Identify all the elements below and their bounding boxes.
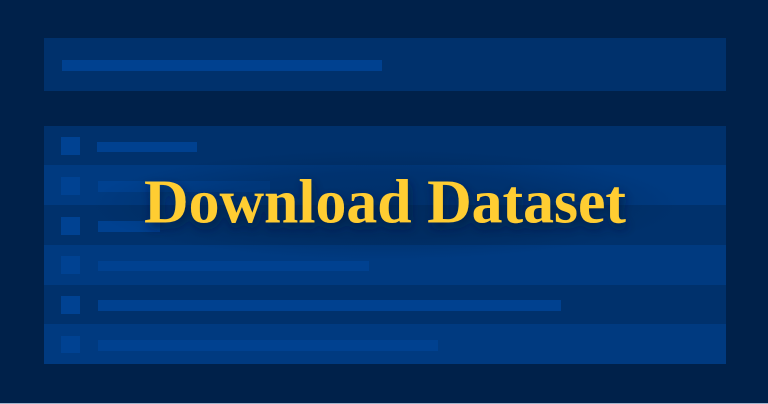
row 4: [44, 245, 726, 285]
row 5 square: [61, 296, 80, 314]
bottom edge line: [0, 403, 768, 404]
row 3 square: [61, 217, 80, 235]
row 5: [61, 296, 561, 314]
row 6 square: [61, 336, 80, 353]
row 1 bar: [97, 142, 197, 152]
row 5 bar: [98, 300, 561, 311]
title: Download Dataset: [144, 168, 626, 236]
row 1: [61, 137, 197, 155]
row 6: [44, 324, 726, 364]
row 6 bar: [98, 340, 438, 351]
row 3: [61, 217, 160, 235]
row 2: [44, 165, 726, 205]
row 2 bar: [98, 181, 270, 192]
header bar: [62, 60, 382, 71]
row 4 bar: [98, 261, 369, 271]
panel: header: [44, 38, 726, 91]
title shadow glow: [90, 150, 680, 260]
row 1 square: [61, 137, 80, 155]
row 4 square: [61, 256, 80, 274]
row 2 square: [61, 177, 80, 195]
row 3 bar: [98, 221, 160, 232]
panel: table: [44, 126, 726, 364]
